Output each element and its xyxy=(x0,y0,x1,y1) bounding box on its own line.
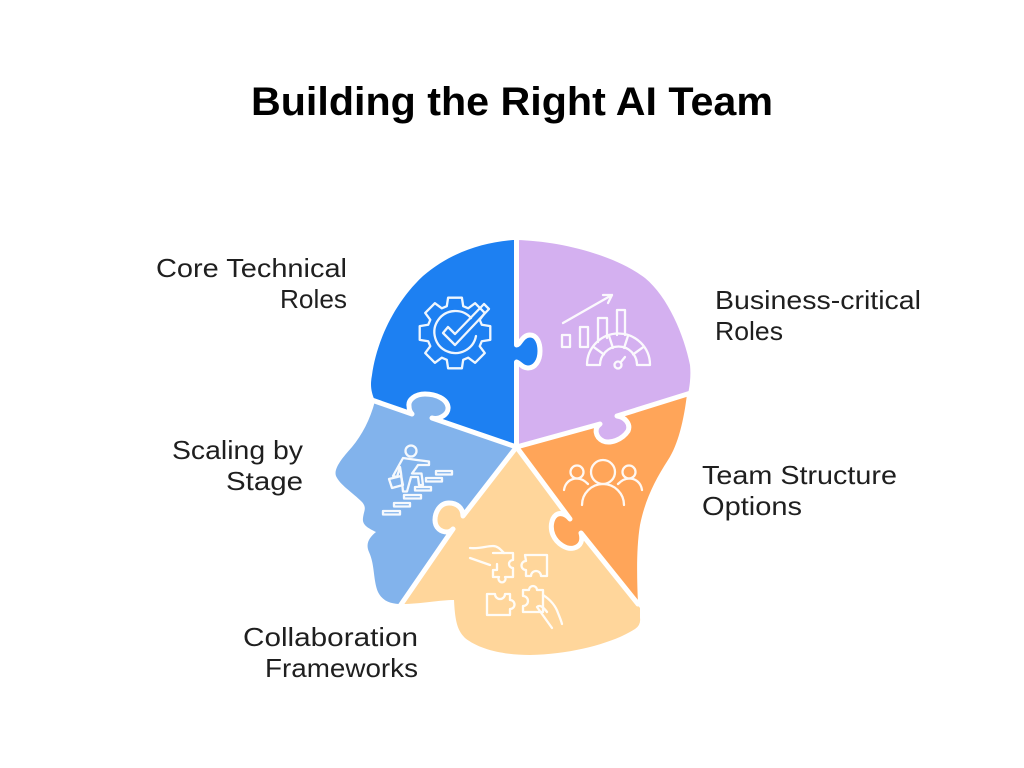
piece: Core Technical Roles xyxy=(371,240,540,447)
label: Collaboration Frameworks: Collaboration xyxy=(243,622,418,652)
blue segment xyxy=(371,240,540,447)
label: Scaling by Stage: Scaling by xyxy=(172,435,303,465)
piece: Business-critical Roles xyxy=(516,240,690,447)
purple segment xyxy=(516,240,690,447)
icon: growth chart with gauge xyxy=(562,295,650,368)
label: Core Technical Roles: Core Technical xyxy=(156,253,347,283)
icon: hands assembling puzzle pieces xyxy=(470,546,562,628)
label: Business-critical Roles: Roles xyxy=(715,316,783,346)
label: Collaboration Frameworks: Frameworks xyxy=(265,653,418,683)
label: Collaboration Frameworks xyxy=(243,622,418,683)
piece: Team Structure Options xyxy=(516,394,687,604)
label: Team Structure Options xyxy=(702,460,897,521)
panel: head puzzle diagram xyxy=(336,240,690,655)
label: Core Technical Roles xyxy=(156,253,347,314)
icon: person climbing stairs xyxy=(383,446,452,514)
peach segment xyxy=(402,447,640,655)
title: Building the Right AI Team xyxy=(251,80,773,124)
label: Team Structure Options: Team Structure xyxy=(702,460,897,490)
icon: gear with check xyxy=(420,298,490,368)
label: Team Structure Options: Options xyxy=(702,491,802,521)
piece: Collaboration Frameworks xyxy=(402,447,640,655)
label: Business-critical Roles: Business-critical xyxy=(715,285,921,315)
label: Core Technical Roles: Roles xyxy=(280,284,347,314)
icon: three people xyxy=(564,460,642,505)
label: Scaling by Stage: Stage xyxy=(226,466,303,496)
orange segment xyxy=(516,394,687,604)
label: Scaling by Stage xyxy=(172,435,303,496)
piece: Scaling by Stage xyxy=(336,394,516,604)
light blue segment xyxy=(336,394,516,604)
label: Business-critical Roles xyxy=(715,285,921,346)
